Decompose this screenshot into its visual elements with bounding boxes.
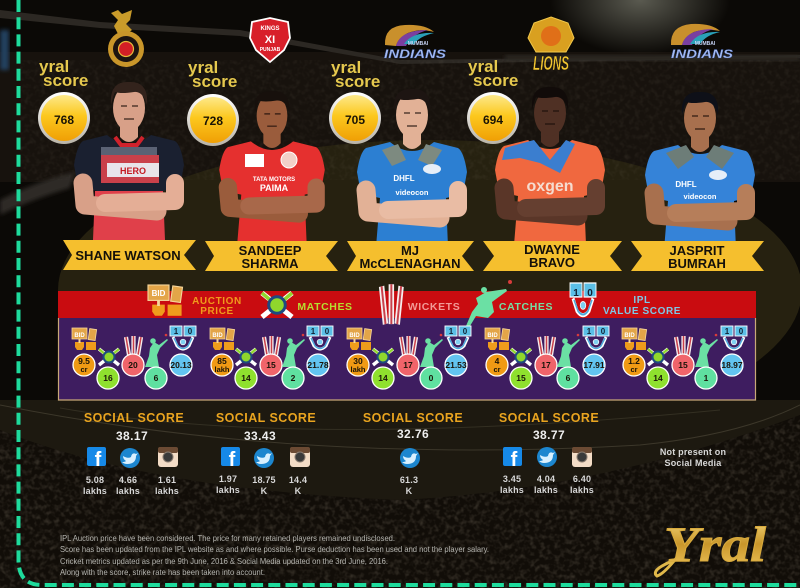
player: Jasprit Bumrah [645, 92, 755, 250]
social score: Shane Watson: 4.66 [119, 475, 137, 485]
social score: Dwayne Bravo [499, 411, 599, 495]
social score: MJ McClenaghan: K [406, 486, 413, 496]
yral score 2: score [192, 72, 237, 91]
logo: Mumbai Indians (Jasprit Bumrah): INDIANS [671, 47, 733, 61]
stats: MJ McClenaghan: 0 [429, 373, 434, 383]
stats: Shane Watson: 16 [103, 373, 113, 383]
social score: MJ McClenaghan: 32.76 [397, 427, 429, 441]
icon: instagram [158, 447, 178, 467]
yral score 4: 694 [483, 113, 503, 127]
social note: Jasprit Bumrah: Not present on [660, 447, 726, 457]
icon: facebook: f [511, 449, 518, 471]
stats: Shane Watson: 1 [174, 327, 179, 336]
player: Shane Watson [74, 82, 184, 240]
legend bar [58, 280, 756, 326]
stats: Jasprit Bumrah: BID [624, 333, 635, 339]
stats: MJ McClenaghan: 14 [378, 373, 388, 383]
yral score 1: score [43, 71, 88, 90]
social score: Dwayne Bravo: lakhs [570, 485, 594, 495]
legend: catches [466, 280, 553, 326]
social score: Dwayne Bravo: SOCIAL SCORE [499, 411, 599, 425]
logo: Mumbai Indians (Jasprit Bumrah) [671, 24, 733, 61]
legend: wickets [382, 284, 460, 324]
logo: Kings XI Punjab: PUNJAB [260, 47, 281, 53]
social score: Shane Watson: lakhs [83, 486, 107, 496]
player: Dwayne Bravo [495, 87, 605, 245]
legend: auction price: BID [152, 289, 166, 298]
logo: Mumbai Indians (MJ McClenaghan) [384, 25, 446, 61]
icon: facebook: f [95, 449, 102, 471]
yral score 4: yral [468, 57, 498, 76]
stats: Sandeep Sharma: 2 [291, 373, 296, 383]
brand logo: Yral: Yral [664, 516, 766, 572]
legend: matches: MATCHES [297, 301, 353, 313]
legend: auction price: PRICE [200, 306, 234, 317]
legend: IPL value score: IPL [633, 295, 651, 306]
yral score 2: yral [188, 58, 218, 77]
stats: Jasprit Bumrah: 0 [739, 327, 744, 336]
social score: Dwayne Bravo: 6.40 [573, 474, 591, 484]
social score: MJ McClenaghan: 61.3 [400, 475, 418, 485]
social score: Sandeep Sharma: lakhs [216, 485, 240, 495]
player: MJ McClenaghan: videocon [396, 188, 429, 197]
stats: Shane Watson: 9.5 [78, 356, 90, 366]
stats: Sandeep Sharma: 21.78 [307, 360, 329, 370]
yral score 1: 768 [54, 113, 74, 127]
stats: MJ McClenaghan: 21.53 [445, 360, 467, 370]
stats: Dwayne Bravo: BID [487, 333, 498, 339]
social score: Sandeep Sharma: 1.97 [219, 474, 237, 484]
logo: Mumbai Indians (MJ McClenaghan): MUMBAI [408, 41, 429, 47]
legend: wickets: WICKETS [408, 301, 460, 313]
stats: Dwayne Bravo: 4 [495, 356, 500, 366]
social note: Jasprit Bumrah [660, 447, 726, 468]
player: Dwayne Bravo: oxgen [526, 178, 574, 195]
name banner: Sandeep Sharma: SHARMA [241, 256, 299, 271]
name banner: Sandeep Sharma [205, 241, 338, 271]
yral score 4: score [473, 71, 518, 90]
player: Sandeep Sharma: PAIMA [260, 183, 289, 193]
stats: Shane Watson: BID [74, 333, 85, 339]
player: MJ McClenaghan [357, 89, 467, 247]
stats: Dwayne Bravo: 1 [587, 327, 592, 336]
stats: Shane Watson: 20.13 [170, 360, 192, 370]
legend: auction price: AUCTION [192, 296, 242, 307]
logo: Mumbai Indians (Jasprit Bumrah): MUMBAI [695, 41, 716, 47]
social score: MJ McClenaghan [363, 411, 463, 496]
logo: Gujarat Lions [528, 17, 574, 75]
legend: IPL value score: 1 [573, 288, 579, 299]
legend: matches [262, 293, 353, 317]
player: Jasprit Bumrah: DHFL [675, 180, 697, 189]
logo: Gujarat Lions: LIONS [533, 53, 569, 75]
icon: twitter [537, 447, 557, 467]
yral score 3: score [335, 72, 380, 91]
player: Sandeep Sharma: TATA MOTORS [253, 177, 295, 183]
legend: IPL value score: 0 [587, 288, 593, 299]
social note: Jasprit Bumrah: Social Media [665, 458, 722, 468]
icon: instagram [290, 447, 310, 467]
stats: Sandeep Sharma: 15 [266, 360, 276, 370]
social score: MJ McClenaghan: SOCIAL SCORE [363, 411, 463, 425]
stats: Dwayne Bravo: 17.91 [583, 360, 605, 370]
player: Shane Watson: HERO [120, 166, 146, 176]
icon: instagram [572, 447, 592, 467]
logo: Kings XI Punjab: XI [265, 34, 275, 46]
social score: Shane Watson: lakhs [116, 486, 140, 496]
name banner: Shane Watson: SHANE WATSON [75, 248, 181, 263]
stats: Jasprit Bumrah: 14 [653, 373, 663, 383]
legend: auction price [148, 285, 242, 317]
stats: Dwayne Bravo: 0 [601, 327, 606, 336]
footnotes: IPL Auction price have been considered. The price for many retained players remained undisclosed. [60, 534, 395, 543]
stats: MJ McClenaghan [347, 326, 471, 389]
stats: Sandeep Sharma: BID [212, 333, 223, 339]
stats: Jasprit Bumrah: 1 [725, 327, 730, 336]
player: Sandeep Sharma [219, 91, 325, 241]
social score: Shane Watson: lakhs [155, 486, 179, 496]
name banner: Dwayne Bravo: BRAVO [529, 255, 575, 270]
logo: Mumbai Indians (MJ McClenaghan): INDIANS [384, 47, 446, 61]
social score: Shane Watson [83, 411, 184, 496]
legend: catches: CATCHES [499, 301, 553, 313]
yral score 3: yral [331, 58, 361, 77]
name banner: MJ McClenaghan: McCLENAGHAN [359, 256, 461, 271]
yral score 2: 728 [203, 114, 223, 128]
name banner: Shane Watson [63, 240, 196, 270]
icon: facebook: f [229, 449, 236, 471]
stats: Sandeep Sharma: lakh [214, 365, 230, 374]
stats: MJ McClenaghan: 0 [463, 327, 468, 336]
yral score 2 [187, 58, 239, 146]
stats: Shane Watson: cr [80, 365, 88, 374]
stats: Shane Watson: 20 [128, 360, 138, 370]
yral score 3 [329, 58, 381, 144]
stats: Dwayne Bravo: 15 [516, 373, 526, 383]
social score: Shane Watson: 38.17 [116, 429, 148, 443]
yral score 1 [38, 57, 90, 144]
stats: Jasprit Bumrah: 15 [678, 360, 688, 370]
logo: Royal Challengers Bangalore [108, 10, 144, 67]
stats: Jasprit Bumrah [622, 326, 747, 389]
social score: Shane Watson: 1.61 [158, 475, 176, 485]
icon: twitter [120, 448, 140, 468]
player: Jasprit Bumrah: videocon [684, 192, 717, 201]
stats: Shane Watson [72, 326, 196, 389]
name banner: Jasprit Bumrah: BUMRAH [668, 256, 726, 271]
stats: Sandeep Sharma: 0 [325, 327, 330, 336]
social score: Sandeep Sharma: K [295, 486, 302, 496]
social score: Dwayne Bravo: lakhs [534, 485, 558, 495]
social score: Dwayne Bravo: lakhs [500, 485, 524, 495]
name banner: Jasprit Bumrah: JASPRIT [670, 243, 725, 258]
stats: MJ McClenaghan: BID [349, 333, 360, 339]
stats: Dwayne Bravo: 17 [541, 360, 551, 370]
yral score 3: 705 [345, 113, 365, 127]
social score: Shane Watson: 5.08 [86, 475, 104, 485]
social score: Sandeep Sharma: SOCIAL SCORE [216, 411, 316, 425]
name banner: Dwayne Bravo [483, 241, 622, 271]
purple stats area [58, 318, 756, 400]
yral score 1: yral [39, 57, 69, 76]
social score: Sandeep Sharma: 18.75 [252, 475, 276, 485]
name banner: MJ McClenaghan: MJ [401, 243, 419, 258]
stats: Sandeep Sharma: 14 [241, 373, 251, 383]
social score: Sandeep Sharma: 33.43 [244, 429, 276, 443]
stats: MJ McClenaghan: 30 [353, 356, 363, 366]
player: MJ McClenaghan: DHFL [393, 174, 415, 183]
stats: Sandeep Sharma: 1 [311, 327, 316, 336]
stats: Sandeep Sharma: 85 [217, 356, 227, 366]
social score: Sandeep Sharma: 14.4 [289, 475, 307, 485]
social score: Dwayne Bravo: 4.04 [537, 474, 555, 484]
stats: MJ McClenaghan: 17 [403, 360, 413, 370]
legend: IPL value score [570, 283, 681, 317]
stats: Jasprit Bumrah: cr [630, 365, 638, 374]
stats: Dwayne Bravo [485, 326, 609, 389]
name banner: Jasprit Bumrah [631, 241, 764, 271]
footnotes: Score has been updated from the IPL website as and where possible. Purse deduction has been used and not the player salary. [60, 545, 489, 554]
stats: Dwayne Bravo: cr [493, 365, 501, 374]
footnotes: Cricket metrics updated as per the 9th June, 2016 & Social Media updated on the 3rd June, 2016. [60, 557, 388, 566]
social score: Dwayne Bravo: 38.77 [533, 428, 565, 442]
stats: MJ McClenaghan: lakh [350, 365, 366, 374]
icon: twitter [254, 448, 274, 468]
logo: Kings XI Punjab: KINGS [260, 26, 280, 32]
yral score 4 [467, 57, 519, 144]
name banner: Dwayne Bravo: DWAYNE [524, 242, 580, 257]
stats: Dwayne Bravo: 6 [566, 373, 571, 383]
stats: Sandeep Sharma [210, 326, 333, 389]
stats: Shane Watson: 0 [188, 327, 193, 336]
social score: Sandeep Sharma: K [261, 486, 268, 496]
name banner: MJ McClenaghan [347, 241, 474, 271]
footnotes [60, 534, 489, 577]
stats: Jasprit Bumrah: 1.2 [628, 356, 640, 366]
footnotes: Along with the score, strike rate has been taken into account. [60, 568, 265, 577]
stats: MJ McClenaghan: 1 [449, 327, 454, 336]
stats: Jasprit Bumrah: 18.97 [721, 360, 743, 370]
legend: IPL value score: VALUE SCORE [603, 306, 681, 317]
name banner: Sandeep Sharma: SANDEEP [239, 243, 302, 258]
social score: Sandeep Sharma [216, 411, 316, 496]
social score: Dwayne Bravo: 3.45 [503, 474, 521, 484]
stats: Shane Watson: 6 [154, 373, 159, 383]
stats: Jasprit Bumrah: 1 [704, 373, 709, 383]
social score: Shane Watson: SOCIAL SCORE [84, 411, 184, 425]
logo: Kings XI Punjab [250, 18, 290, 62]
panel: stats table [58, 280, 756, 400]
icon: twitter [400, 448, 420, 468]
